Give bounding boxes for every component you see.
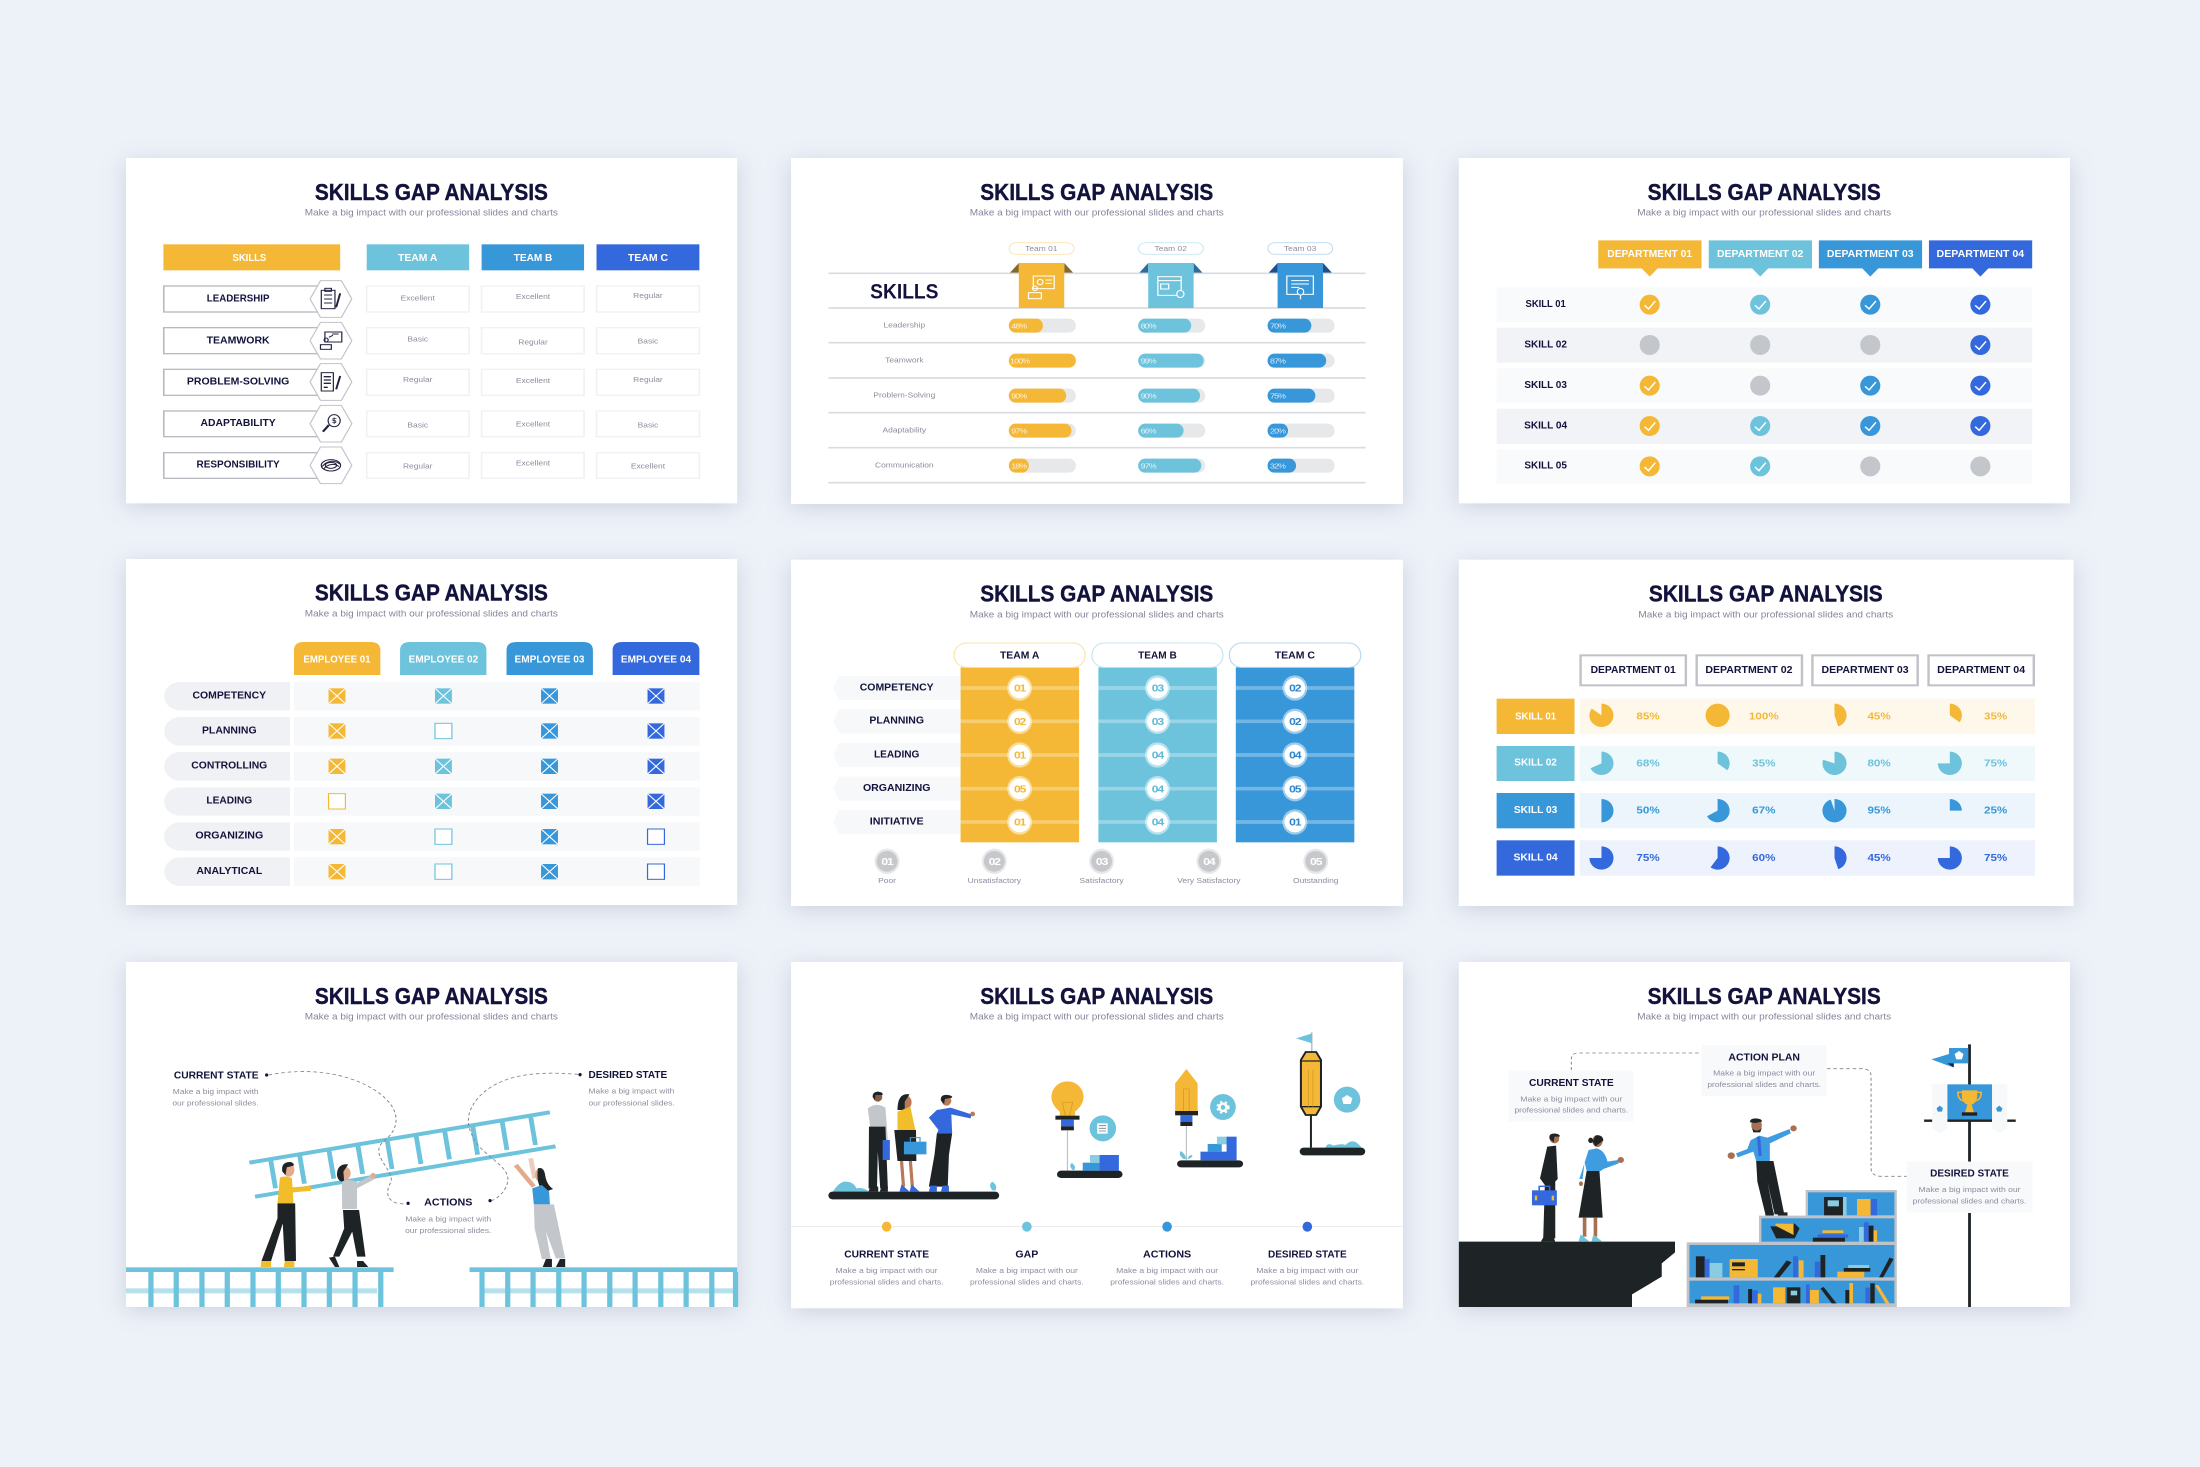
row: communication: 32%	[1270, 462, 1286, 470]
goal pole with flag and trophy	[1924, 1044, 2016, 1307]
title: SKILLS GAP ANALYSIS	[1648, 180, 1881, 205]
panel: department pie table	[1459, 560, 2074, 906]
skill row: responsibility	[164, 447, 699, 484]
skill row: problem-solving: Excellent	[516, 377, 551, 385]
title: SKILLS GAP ANALYSIS	[315, 984, 548, 1009]
column: team b: 04	[1152, 784, 1165, 795]
callout: desired state	[1907, 1162, 2033, 1213]
department headers: DEPARTMENT 03	[1821, 665, 1909, 676]
department headers: DEPARTMENT 01	[1591, 665, 1676, 676]
row: communication: 97%	[1141, 462, 1156, 470]
connector dots	[265, 1073, 582, 1205]
team pills: Team 01	[1025, 245, 1058, 253]
title: SKILLS GAP ANALYSIS	[1649, 581, 1883, 607]
row: skill 05: SKILL 05	[1524, 461, 1567, 471]
bookshelf	[1687, 1190, 1897, 1307]
row: skill 03: 50%	[1636, 806, 1660, 816]
rating legend: Poor	[878, 877, 896, 885]
row: competency	[164, 682, 700, 710]
department headers	[1581, 655, 2034, 685]
panel: employee competency matrix	[126, 559, 737, 905]
row labels	[833, 676, 961, 834]
skill row: responsibility: RESPONSIBILITY	[197, 460, 280, 470]
team pills: Team 02	[1155, 245, 1187, 253]
row: skill 04: 75%	[1984, 853, 2008, 864]
skill row: problem-solving: PROBLEM-SOLVING	[187, 377, 289, 387]
row: skill 01: 85%	[1636, 712, 1660, 722]
step: gap	[970, 1222, 1084, 1286]
row: skill 03	[1497, 368, 2032, 403]
row: planning	[164, 717, 700, 746]
skill row: teamwork: Regular	[518, 338, 548, 346]
rating legend: Very Satisfactory	[1177, 877, 1241, 885]
column: team b: 04	[1152, 751, 1165, 761]
illustration: light bulb with document	[1051, 1081, 1123, 1178]
illustration: group of three people	[828, 1092, 999, 1199]
text block: actions	[405, 1198, 491, 1235]
department headers: DEPARTMENT 03	[1827, 249, 1914, 260]
header row	[163, 244, 699, 270]
row: skill 04: 75%	[1636, 853, 1660, 864]
row: leading	[164, 787, 700, 816]
person: reaching up	[516, 1158, 565, 1267]
panel: department check matrix	[1459, 158, 2070, 503]
column: team c	[1229, 643, 1361, 842]
row: adaptability: 97%	[1011, 427, 1027, 435]
employee headers: EMPLOYEE 02	[409, 654, 478, 665]
skill row: teamwork: Basic	[407, 335, 428, 343]
rating legend: Outstanding	[1293, 877, 1339, 885]
row: teamwork: 100%	[1010, 357, 1030, 365]
callout: desired state: DESIRED STATE	[1930, 1168, 2009, 1179]
panel: team score columns	[791, 560, 1403, 906]
panel: skill progress bars	[791, 158, 1403, 504]
person: man in suit with briefcase	[1532, 1133, 1560, 1242]
column: team a: TEAM A	[1000, 650, 1039, 661]
row: planning: PLANNING	[202, 725, 257, 736]
employee headers: EMPLOYEE 01	[303, 654, 371, 665]
illustration: tall bulb with gear	[1175, 1069, 1243, 1167]
skill row: adaptability: Basic	[407, 421, 428, 429]
skill row: leadership: Excellent	[516, 293, 551, 301]
row: skill 02	[1497, 328, 2032, 363]
row: skill 03: SKILL 03	[1524, 380, 1567, 391]
dashed path: current state to actions	[269, 1072, 406, 1204]
title: SKILLS GAP ANALYSIS	[315, 581, 548, 606]
row labels: COMPETENCY	[860, 682, 934, 693]
step: actions: ACTIONS	[1143, 1250, 1191, 1260]
subtitle: Make a big impact with our professional slides and charts	[1637, 1012, 1891, 1022]
step: current state: CURRENT STATE	[844, 1250, 929, 1260]
title: SKILLS GAP ANALYSIS	[1648, 984, 1881, 1009]
ribbon icon: team 02	[1139, 263, 1202, 308]
skill row: adaptability: Excellent	[516, 420, 551, 428]
department headers: DEPARTMENT 02	[1705, 665, 1793, 676]
department headers: DEPARTMENT 04	[1937, 665, 2026, 676]
row: skill 04: SKILL 04	[1513, 852, 1558, 863]
row: teamwork: Teamwork	[885, 356, 924, 364]
row: skill 02: SKILL 02	[1524, 339, 1567, 350]
panel: cliff, bookshelf and goal	[1459, 962, 2070, 1307]
row: problem-solving: 90%	[1141, 392, 1156, 400]
header row: TEAM C	[628, 253, 668, 264]
rating legend: 03	[1096, 857, 1108, 868]
row: adaptability: 66%	[1141, 427, 1156, 435]
step: actions: Make a big impact with our	[1116, 1267, 1219, 1275]
row: leadership: 70%	[1270, 322, 1286, 330]
callout: action plan: Make a big impact with our	[1713, 1069, 1816, 1077]
row: skill 01	[1497, 287, 2032, 322]
subtitle: Make a big impact with our professional slides and charts	[970, 610, 1224, 620]
row: skill 02: 75%	[1984, 759, 2008, 769]
row: problem-solving: 75%	[1270, 392, 1286, 400]
row: skill 01: 100%	[1749, 712, 1779, 722]
department headers: DEPARTMENT 02	[1717, 249, 1803, 260]
row: communication	[875, 459, 1335, 473]
row: skill 02: 80%	[1867, 759, 1891, 769]
rating legend: 04	[1203, 857, 1217, 868]
skill row: teamwork: TEAMWORK	[207, 335, 270, 346]
row: analytical	[164, 857, 700, 886]
timeline axis	[791, 1225, 1403, 1228]
title: SKILLS GAP ANALYSIS	[315, 180, 548, 205]
skill row: adaptability: ADAPTABILITY	[201, 418, 276, 429]
platform: right bridge	[470, 1267, 737, 1307]
row: adaptability: Adaptability	[883, 426, 926, 434]
subtitle: Make a big impact with our professional slides and charts	[970, 208, 1224, 218]
row: leadership: Leadership	[883, 321, 925, 329]
column: team c: 01	[1289, 818, 1301, 828]
column: team a: 01	[1014, 818, 1026, 828]
skill row: adaptability	[164, 405, 699, 442]
header row: TEAM A	[398, 253, 437, 264]
row: problem-solving	[873, 389, 1335, 403]
row: analytical: ANALYTICAL	[196, 866, 262, 877]
row: skill 02	[1497, 746, 2035, 781]
column: team a: 05	[1014, 784, 1026, 795]
title: SKILLS GAP ANALYSIS	[980, 581, 1213, 607]
ribbon icon: team 01	[1010, 263, 1073, 308]
text block: actions: Make a big impact with	[405, 1215, 491, 1223]
callout: desired state: professional slides and charts.	[1913, 1197, 2026, 1205]
illustration: pencil with flag	[1296, 1032, 1365, 1155]
text block: desired state: DESIRED STATE	[588, 1070, 667, 1081]
step: actions	[1110, 1222, 1224, 1286]
department headers: DEPARTMENT 01	[1607, 249, 1692, 260]
column: team a	[954, 643, 1085, 842]
step: desired state: DESIRED STATE	[1268, 1250, 1347, 1260]
employee headers	[294, 642, 699, 675]
row: communication: 18%	[1011, 462, 1027, 470]
skill row: problem-solving: Regular	[403, 376, 433, 384]
text block: current state: our professional slides.	[172, 1099, 259, 1107]
row: skill 04: SKILL 04	[1524, 420, 1568, 431]
department headers	[1598, 240, 2032, 277]
row: skill 02: 68%	[1636, 759, 1660, 769]
subtitle: Make a big impact with our professional slides and charts	[305, 609, 558, 619]
row: problem-solving: Problem-Solving	[873, 391, 935, 399]
row: skill 01: SKILL 01	[1526, 299, 1566, 310]
column: team a: 01	[1014, 751, 1026, 761]
row: skill 03: 25%	[1984, 806, 2008, 816]
text block: current state: CURRENT STATE	[174, 1070, 259, 1081]
callout: current state: professional slides and charts.	[1514, 1106, 1628, 1114]
skill row: problem-solving	[164, 364, 699, 400]
row: organizing	[164, 822, 700, 851]
header row: SKILLS	[233, 253, 266, 264]
row: skill 04: 60%	[1752, 853, 1776, 864]
header row: TEAM B	[514, 253, 552, 264]
row labels: INITIATIVE	[870, 816, 924, 827]
text block: actions: our professional slides.	[405, 1227, 491, 1235]
subtitle: Make a big impact with our professional slides and charts	[970, 1012, 1224, 1022]
callout: action plan: professional slides and charts.	[1707, 1081, 1821, 1089]
step: current state	[830, 1222, 944, 1286]
callout: action plan	[1702, 1045, 1827, 1096]
person: grey top	[329, 1164, 376, 1267]
column: team b: 03	[1152, 684, 1164, 694]
cliff	[1459, 1242, 1675, 1307]
callout: current state: CURRENT STATE	[1529, 1078, 1614, 1089]
row: adaptability: 20%	[1270, 427, 1286, 435]
step: current state: professional slides and charts.	[830, 1278, 944, 1286]
subtitle: Make a big impact with our professional slides and charts	[1637, 208, 1891, 218]
row: leading: LEADING	[206, 796, 252, 806]
skill row: leadership	[164, 281, 699, 317]
column: team a: 02	[1014, 717, 1026, 728]
rating legend: 05	[1310, 857, 1322, 868]
subtitle: Make a big impact with our professional slides and charts	[1638, 610, 1893, 620]
department headers: DEPARTMENT 04	[1937, 249, 2025, 260]
row: teamwork: 87%	[1270, 357, 1286, 365]
row: controlling	[164, 752, 700, 781]
row: skill 05	[1497, 449, 2032, 484]
rating legend: Unsatisfactory	[968, 877, 1021, 885]
skill row: teamwork: Basic	[638, 337, 658, 345]
row: skill 04	[1497, 840, 2035, 876]
skill row: leadership: LEADERSHIP	[207, 294, 269, 304]
team pills	[1009, 243, 1333, 254]
row labels: PLANNING	[869, 716, 924, 726]
row: skill 03: 95%	[1867, 806, 1891, 816]
row: skill 01: SKILL 01	[1515, 711, 1556, 722]
person: woman in blue top	[1579, 1135, 1624, 1242]
column: team c: 02	[1289, 684, 1301, 694]
row: skill 03: SKILL 03	[1514, 805, 1557, 816]
row: skill 01	[1497, 699, 2035, 734]
row: teamwork	[885, 354, 1335, 368]
skill row: responsibility: Excellent	[631, 462, 666, 470]
skill row: leadership: Regular	[633, 292, 663, 300]
row: communication: Communication	[875, 461, 934, 469]
column: team b: 04	[1152, 818, 1165, 828]
title: SKILLS GAP ANALYSIS	[980, 180, 1213, 205]
row: problem-solving: 90%	[1011, 392, 1027, 400]
row: skill 04: 45%	[1867, 853, 1891, 864]
step: desired state: Make a big impact with our	[1256, 1267, 1359, 1275]
row: leadership	[883, 319, 1335, 333]
column: team c: 02	[1289, 717, 1301, 728]
heading: skills: SKILLS	[870, 280, 938, 304]
team pills: Team 03	[1284, 245, 1316, 253]
employee headers: EMPLOYEE 03	[515, 654, 584, 665]
row: organizing: ORGANIZING	[195, 831, 263, 841]
skill row: responsibility: Excellent	[516, 459, 551, 467]
row: leadership: 80%	[1141, 322, 1156, 330]
row: skill 01: 45%	[1867, 712, 1891, 722]
column: team c: TEAM C	[1275, 650, 1315, 661]
row: competency: COMPETENCY	[193, 690, 267, 701]
row: skill 04	[1497, 409, 2032, 444]
row labels: LEADING	[874, 749, 919, 760]
row: skill 02: 35%	[1752, 759, 1776, 769]
skill row: teamwork	[164, 322, 699, 359]
row: controlling: CONTROLLING	[191, 761, 267, 771]
column: team b: 03	[1152, 717, 1164, 728]
person: man pointing	[1728, 1118, 1797, 1216]
skill row: adaptability: Basic	[638, 421, 658, 429]
rating legend: Satisfactory	[1080, 877, 1124, 885]
text block: desired state: our professional slides.	[588, 1099, 675, 1107]
skill row: problem-solving: Regular	[633, 376, 663, 384]
person: yellow shirt	[261, 1162, 311, 1267]
row: adaptability	[883, 424, 1335, 438]
skill row: responsibility: Regular	[403, 462, 433, 470]
platform: left bridge	[126, 1267, 394, 1307]
ladder	[249, 1112, 556, 1197]
ribbon icon: team 03	[1269, 263, 1332, 308]
row: leadership: 48%	[1011, 322, 1027, 330]
callout: current state: Make a big impact with our	[1520, 1095, 1623, 1103]
rating legend: 02	[989, 857, 1001, 868]
panel: ladder across the gap	[126, 962, 737, 1307]
dashed path: actions to desired state	[468, 1073, 578, 1201]
step: actions: professional slides and charts.	[1110, 1278, 1224, 1286]
title: SKILLS GAP ANALYSIS	[980, 984, 1213, 1009]
row: skill 01: 35%	[1984, 712, 2008, 722]
subtitle: Make a big impact with our professional slides and charts	[305, 1012, 558, 1022]
rating legend	[875, 849, 1339, 885]
text block: current state	[172, 1070, 259, 1107]
row: skill 03	[1497, 793, 2035, 828]
step: desired state	[1250, 1222, 1364, 1286]
text block: desired state	[588, 1070, 675, 1107]
column: team a: 01	[1014, 684, 1026, 694]
dashed connector: action plan to desired state	[1827, 1069, 1907, 1176]
text block: current state: Make a big impact with	[173, 1088, 259, 1096]
skill row: leadership: Excellent	[401, 294, 436, 302]
rating legend: 01	[881, 857, 894, 868]
table rules	[828, 273, 1366, 483]
step: gap: professional slides and charts.	[970, 1278, 1084, 1286]
step: current state: Make a big impact with our	[836, 1267, 938, 1275]
row: skill 03: 67%	[1752, 806, 1776, 816]
row: teamwork: 99%	[1141, 357, 1156, 365]
column: team b: TEAM B	[1138, 650, 1177, 661]
column: team c: 05	[1289, 784, 1301, 795]
row: skill 02: SKILL 02	[1514, 758, 1557, 768]
panel: skills by team ratings	[126, 158, 737, 503]
column: team c: 04	[1289, 751, 1302, 761]
text block: desired state: Make a big impact with	[588, 1087, 674, 1095]
row labels: ORGANIZING	[863, 783, 930, 794]
text block: actions: ACTIONS	[424, 1198, 472, 1208]
subtitle: Make a big impact with our professional slides and charts	[305, 208, 558, 218]
step: gap: Make a big impact with our	[976, 1267, 1078, 1275]
step: gap: GAP	[1015, 1250, 1038, 1260]
panel: timeline of states	[791, 962, 1403, 1308]
callout: desired state: Make a big impact with our	[1918, 1186, 2021, 1194]
callout: action plan: ACTION PLAN	[1728, 1052, 1800, 1063]
column: team b	[1092, 643, 1223, 842]
step: desired state: professional slides and charts.	[1250, 1278, 1364, 1286]
callout: current state	[1509, 1071, 1634, 1122]
dashed connector: current state to action plan	[1571, 1053, 1701, 1070]
employee headers: EMPLOYEE 04	[621, 654, 692, 665]
